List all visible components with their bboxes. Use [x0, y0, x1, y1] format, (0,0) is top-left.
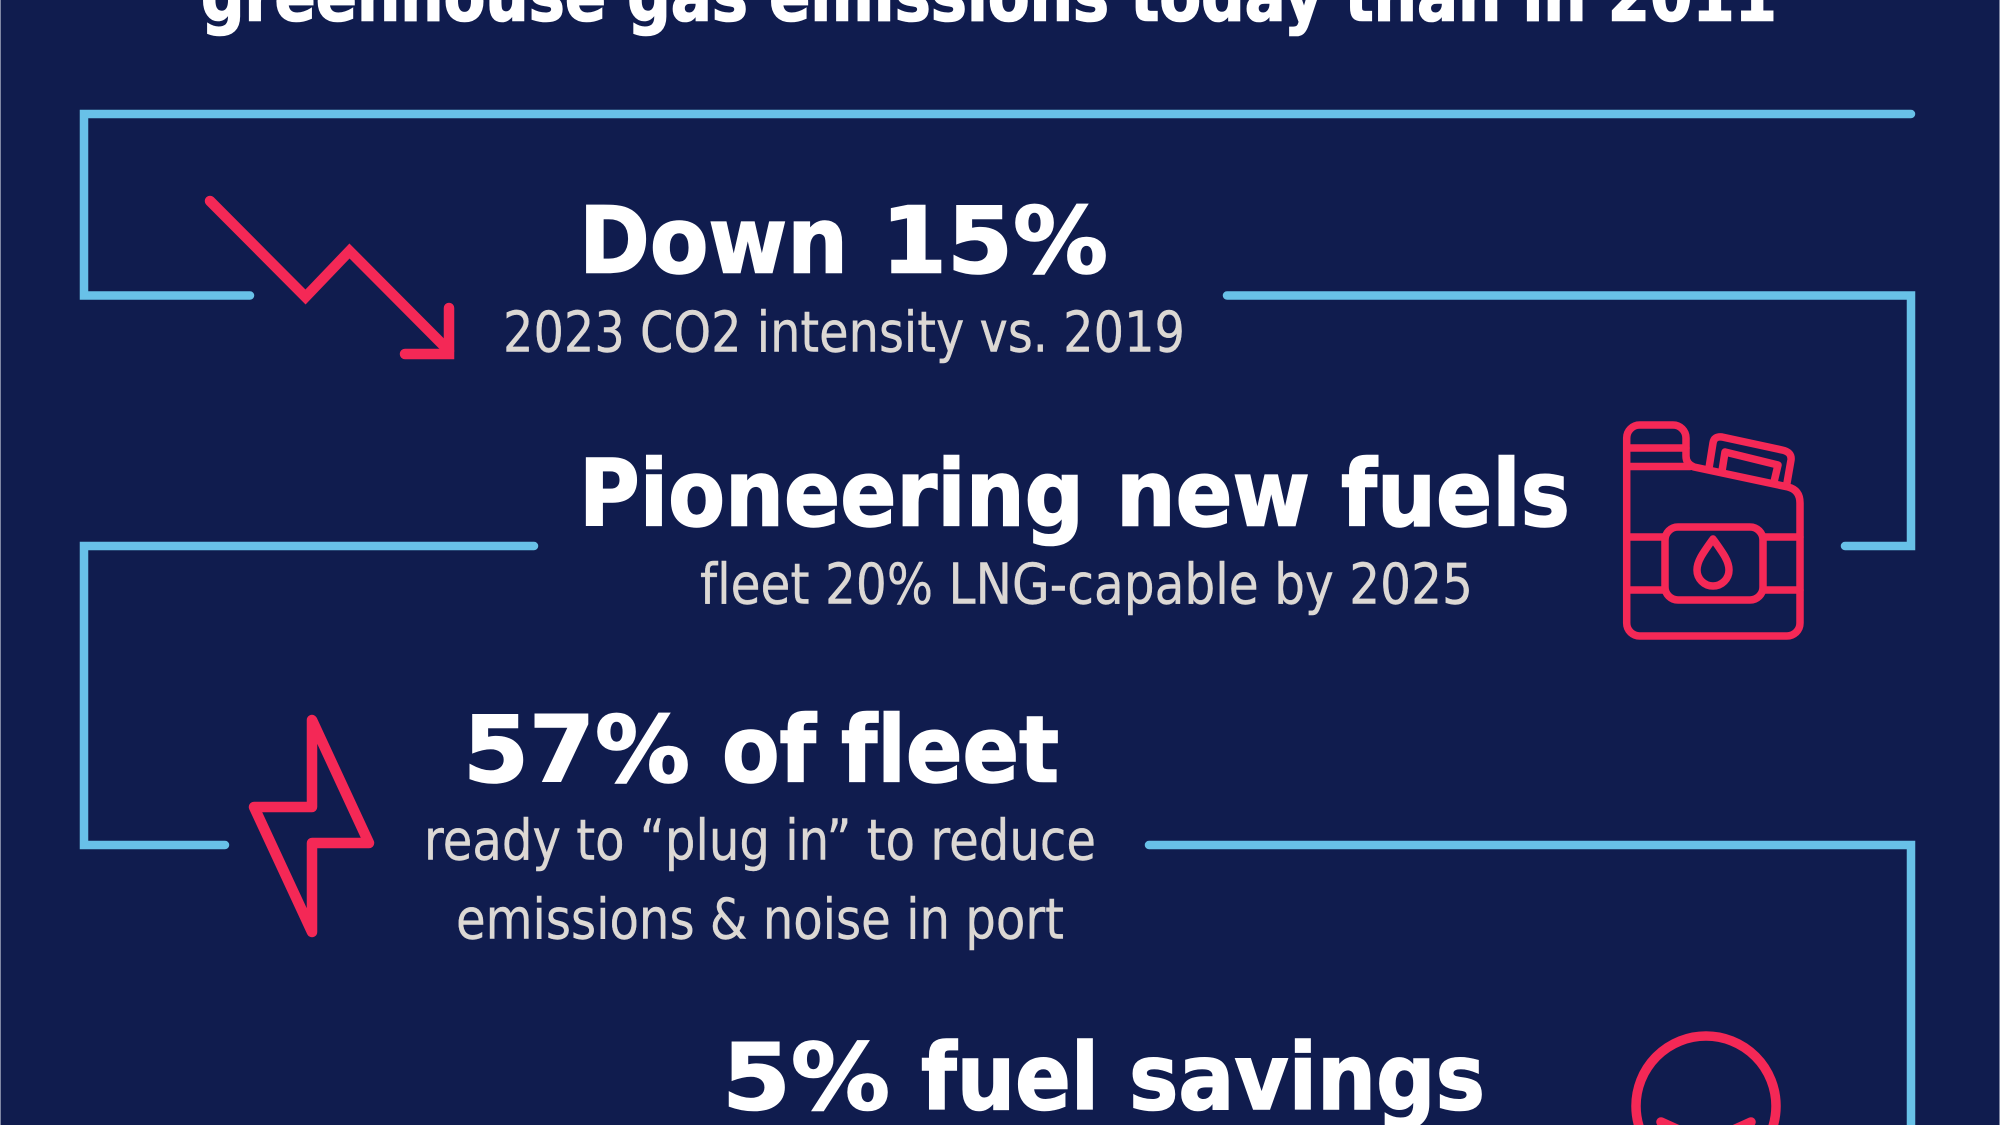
heading: 57% of fleet [463, 696, 1059, 804]
heading: Pioneering new fuels: new [1116, 440, 1310, 548]
text: CO2 intensity: 2023 CO2 intensity vs. 2019 [503, 300, 1185, 366]
heading: 57% of fleet: 57% [463, 696, 690, 804]
text: LNG-capable: fleet 20% LNG-capable by 2025 [700, 552, 1473, 618]
connector: first item to second item [1227, 296, 1911, 546]
connector: top line to first item [84, 114, 1911, 296]
heading: Pioneering new fuels [579, 440, 1570, 548]
icon: lightning bolt [254, 720, 369, 932]
text: emissions and noise: emissions & noise in port [456, 888, 1064, 952]
icon: fuel savings gauge [1636, 1036, 1776, 1125]
heading: Pioneering new fuels: fuels [1341, 440, 1570, 548]
heading: 57% of fleet: of [722, 696, 817, 804]
icon: falling arrow [210, 201, 449, 354]
heading: Down 15%: Down [579, 188, 848, 294]
item: pioneering new fuels [579, 440, 1570, 618]
connector: third item to fourth item [1149, 845, 1911, 1125]
heading: Down 15%: 15% [881, 188, 1108, 294]
heading: 57% of fleet: fleet [841, 696, 1059, 804]
heading: Pioneering new fuels: Pioneering [579, 440, 1084, 548]
heading: Down 15% [579, 188, 1108, 294]
connector: second item to third item [84, 546, 534, 845]
icon: fuel canister [1627, 425, 1800, 636]
item: down 15% [503, 188, 1185, 366]
text: plug in: ready to “plug in” to reduce [424, 808, 1096, 874]
heading: 5% fuel savings [722, 1024, 1485, 1125]
item: 5% fuel savings [722, 1024, 1485, 1125]
item: 57% of fleet [424, 696, 1096, 952]
